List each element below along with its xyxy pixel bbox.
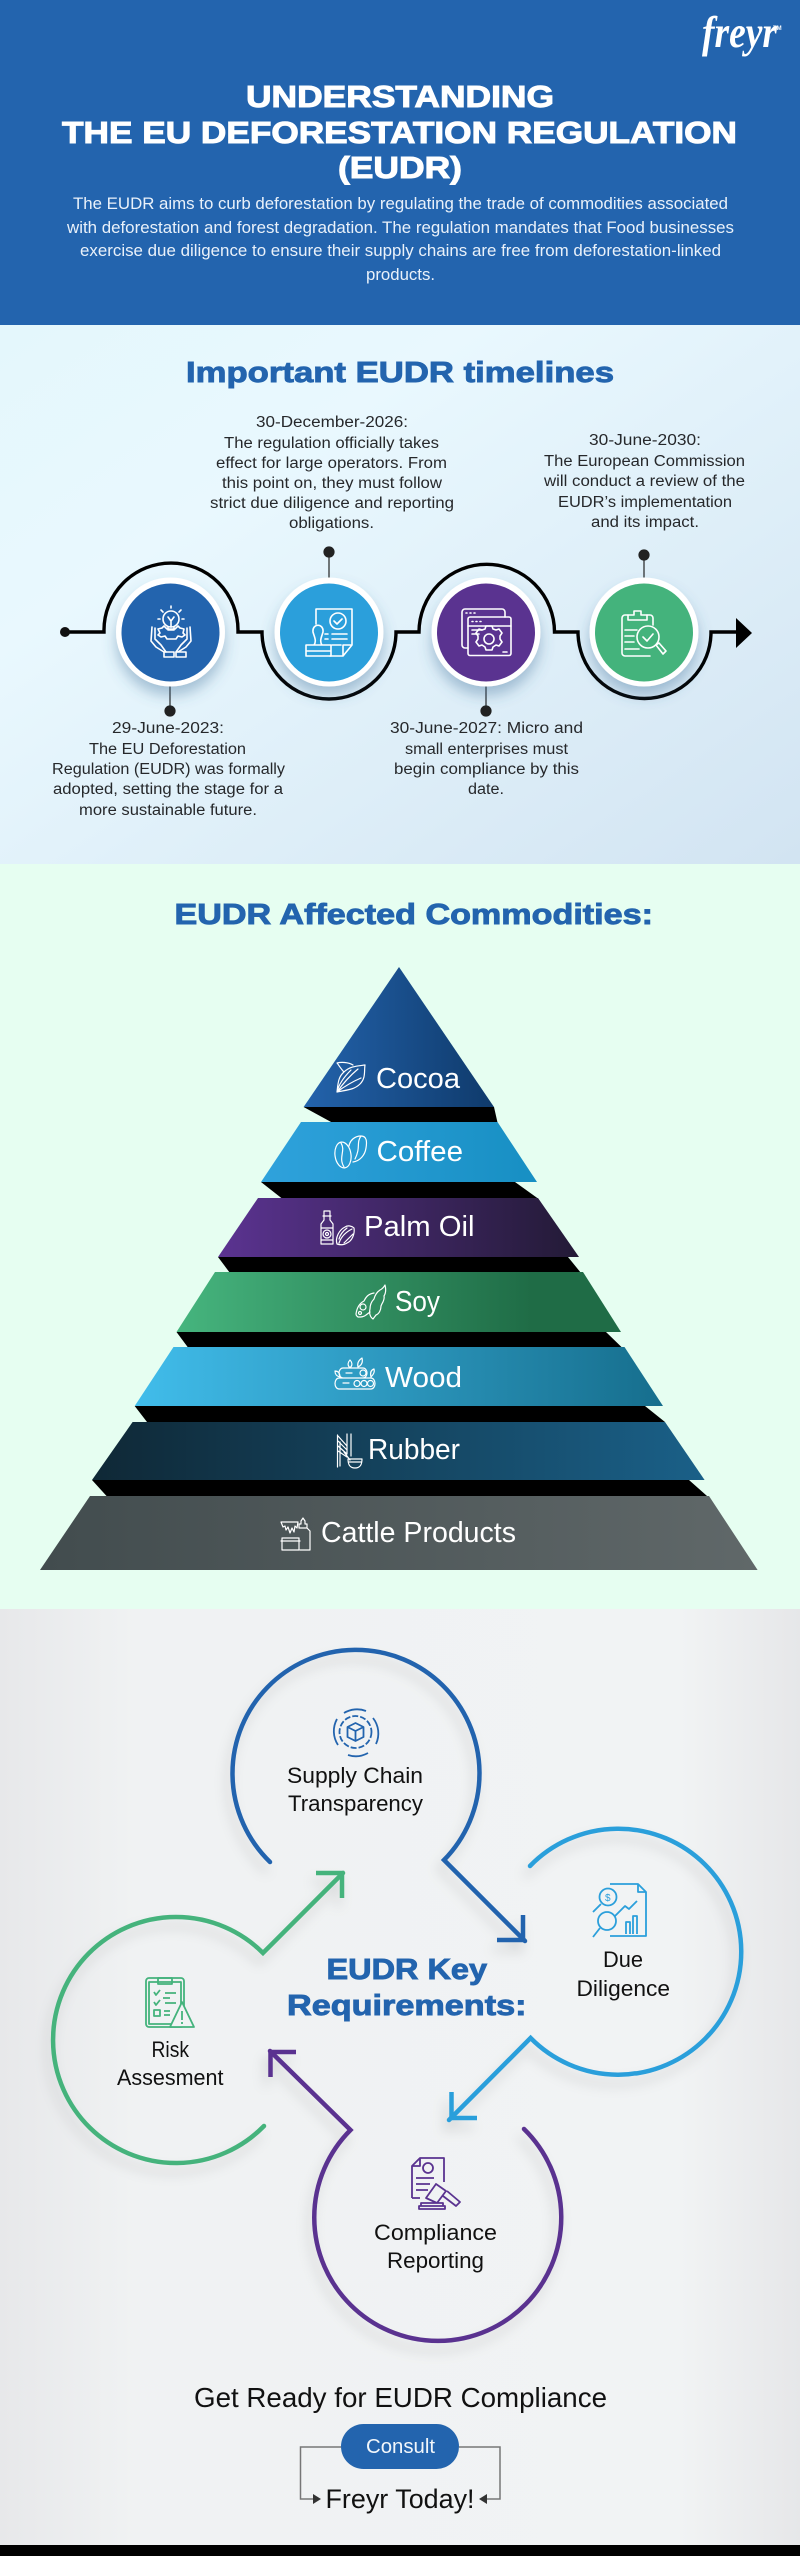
footer bar [0,2545,800,2556]
text: 30-June-2030: EUDR’s implementation [558,494,732,511]
tier: cocoa [304,967,494,1107]
loop: due diligence: Due [603,1947,643,1972]
loop: supply chain transparency: Transparency [288,1791,423,1816]
panel: key requirements [0,1609,800,2545]
icon: report with magnifiers: $ [605,1893,611,1904]
heading: key requirements: EUDR Key [326,1954,487,1986]
icon: cocoa pod [337,1062,365,1092]
loop: risk assessment: Assesment [117,2065,224,2090]
heading: key requirements [287,1954,526,2022]
icon: soy pod [356,1285,386,1319]
milestone circle: 2026 [274,578,384,686]
call to action: Freyr Today! [326,2484,474,2514]
logo: freyr: freyr [702,8,778,57]
text: 29-June-2023 [52,720,285,819]
bracket arrows [300,2447,500,2504]
icon: browser windows with gear [462,609,511,656]
text: 30-June-2030: The European Commission [544,453,745,470]
timeline path [60,563,752,699]
text: 30-June-2027: begin compliance by this [394,761,579,778]
tier: palm oil [218,1198,579,1257]
text: 30-December-2026: this point on, they must follow [222,475,443,492]
loop: supply chain transparency: Supply Chain [287,1763,423,1788]
logo: freyr: TM [773,26,782,32]
intro paragraph: The EUDR aims to curb deforestation by regulating the trade of commodities associated [73,194,728,213]
icon: document and gavel [412,2158,460,2209]
tier: soy: Soy [395,1286,440,1318]
text: 29-June-2023: 29-June-2023: [112,720,224,737]
text: 29-June-2023: The EU Deforestation [89,741,246,758]
tier: cattle products [40,1496,758,1570]
loop: supply chain transparency [232,1650,525,1941]
icon: rubber tree tap [338,1434,362,1468]
tier: rubber [92,1422,705,1480]
tier: coffee [261,1122,537,1182]
text: 30-December-2026: strict due diligence and reporting [210,495,454,512]
icon: report with magnifiers [593,1884,646,1937]
text: 30-December-2026 [210,414,454,532]
heading: timelines: Important EUDR timelines [186,357,614,389]
connectors [165,547,649,716]
call to action [194,2382,607,2514]
text: 30-June-2027 [390,720,583,798]
heading: key requirements: Requirements: [287,1990,526,2022]
text: 30-June-2030: and its impact. [591,514,699,531]
button: consult: Consult [366,2436,435,2458]
pyramid [40,967,758,1570]
milestone circle: 2027 [432,578,540,686]
panel: affected commodities [0,864,800,1609]
milestone circle: 2030 [590,578,698,686]
text: 30-June-2027: small enterprises must [405,741,569,758]
icon: hands with bulb and gear [151,606,191,657]
loop: risk assessment: Risk [152,2037,190,2062]
title: THE EU DEFORESTATION REGULATION [62,115,737,150]
text: 30-June-2030: will conduct a review of the [543,473,745,490]
text: 30-June-2027: date. [468,781,504,798]
text: 30-June-2030 [543,432,745,531]
text: 30-June-2030: 30-June-2030: [589,432,701,449]
intro paragraph: products. [366,265,435,284]
tier: wood [135,1347,663,1406]
milestone circle: 2023 [116,578,225,686]
button: consult [341,2424,459,2469]
tier: soy [176,1272,621,1332]
tier: wood: Wood [385,1362,462,1394]
intro paragraph [66,194,734,284]
loop: risk assessment [53,1873,343,2163]
loop: compliance reporting: Reporting [387,2248,484,2273]
intro paragraph: exercise due diligence to ensure their supply chains are free from deforestation-linked [80,241,721,260]
title [62,79,737,185]
panel: timelines [0,325,800,864]
text: 30-December-2026: obligations. [289,515,374,532]
loop: compliance reporting: Compliance [374,2220,497,2245]
title: (EUDR) [338,150,462,185]
loop: due diligence: Diligence [576,1976,670,2001]
loop: compliance reporting [270,2051,561,2341]
tier: palm oil: Palm Oil [364,1211,474,1243]
loop: due diligence [449,1829,741,2120]
icon: milk bucket and bottle [281,1518,310,1550]
icon: clipboard with magnifier [622,611,666,656]
heading: commodities: EUDR Affected Commodities: [174,899,653,931]
call to action: Get Ready for EUDR Compliance [194,2382,607,2413]
tier: rubber: Rubber [368,1434,460,1466]
icon: logs [335,1358,375,1389]
icon: checklist with warning [146,1978,194,2027]
text: 29-June-2023: Regulation (EUDR) was formally [52,761,285,778]
tier: coffee: Coffee [376,1136,463,1168]
text: 29-June-2023: more sustainable future. [79,802,257,819]
icon: gear with cube [334,1709,378,1756]
text: 30-December-2026: effect for large operators. From [216,455,447,472]
icon: document and stamp [306,609,352,656]
intro paragraph: with deforestation and forest degradation. The regulation mandates that Food businesses [66,218,734,237]
tier: cattle products: Cattle Products [321,1517,516,1549]
text: 30-June-2027: 30-June-2027: Micro and [390,720,583,737]
title: UNDERSTANDING [246,79,554,114]
panel: header [0,0,800,325]
text: 30-December-2026: The regulation officially takes [224,435,439,452]
tier: cocoa: Cocoa [376,1063,461,1095]
icon: coffee beans [333,1136,366,1169]
text: 29-June-2023: adopted, setting the stage for a [53,781,283,798]
icon: oil bottle and palm fruit [321,1211,354,1245]
text: 30-December-2026: 30-December-2026: [256,414,408,431]
